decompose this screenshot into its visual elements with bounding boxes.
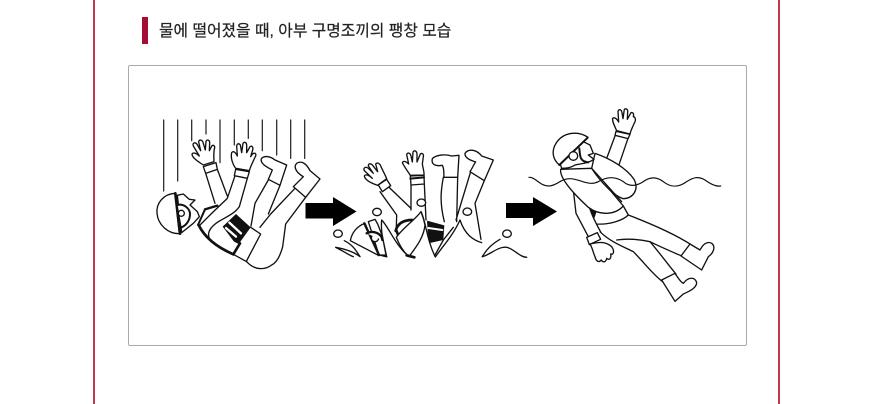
left arm and glove xyxy=(364,163,411,227)
helmet and head xyxy=(553,133,594,168)
water ripples xyxy=(336,239,527,257)
bubbles xyxy=(334,199,511,237)
right arm and glove xyxy=(402,151,426,220)
heading accent bar xyxy=(142,17,148,44)
arrow: second to third xyxy=(506,197,557,226)
figure entering water xyxy=(334,150,527,257)
icon: helmet and head xyxy=(350,219,386,256)
right glove and cuff xyxy=(231,142,256,178)
left frame line xyxy=(93,0,95,404)
heading: 물에 떨어졌을 때, 아부 구명조끼의 팽창 모습 xyxy=(159,23,451,40)
legs and pants xyxy=(240,180,306,269)
harness xyxy=(396,220,453,255)
right frame line xyxy=(778,0,780,404)
speed lines xyxy=(164,120,305,191)
harness straps xyxy=(198,206,261,262)
boots xyxy=(261,157,320,197)
figure floating in inflated life vest xyxy=(529,109,721,301)
waterline xyxy=(529,177,721,186)
icon: helmet and head xyxy=(157,193,199,234)
panel: illustration frame xyxy=(128,65,747,346)
raised arm and glove xyxy=(607,109,635,167)
left glove and sleeve xyxy=(192,140,227,203)
splash columns in front of the body xyxy=(380,212,482,257)
boots xyxy=(662,243,714,301)
legs xyxy=(595,215,690,282)
legs xyxy=(441,172,484,239)
boots xyxy=(432,150,493,181)
arrow: first to second xyxy=(306,197,356,226)
torso and right arm xyxy=(199,176,250,254)
falling figure before entering water xyxy=(157,120,320,269)
inflated life vest xyxy=(561,153,636,213)
torso and lower arm xyxy=(573,173,628,262)
